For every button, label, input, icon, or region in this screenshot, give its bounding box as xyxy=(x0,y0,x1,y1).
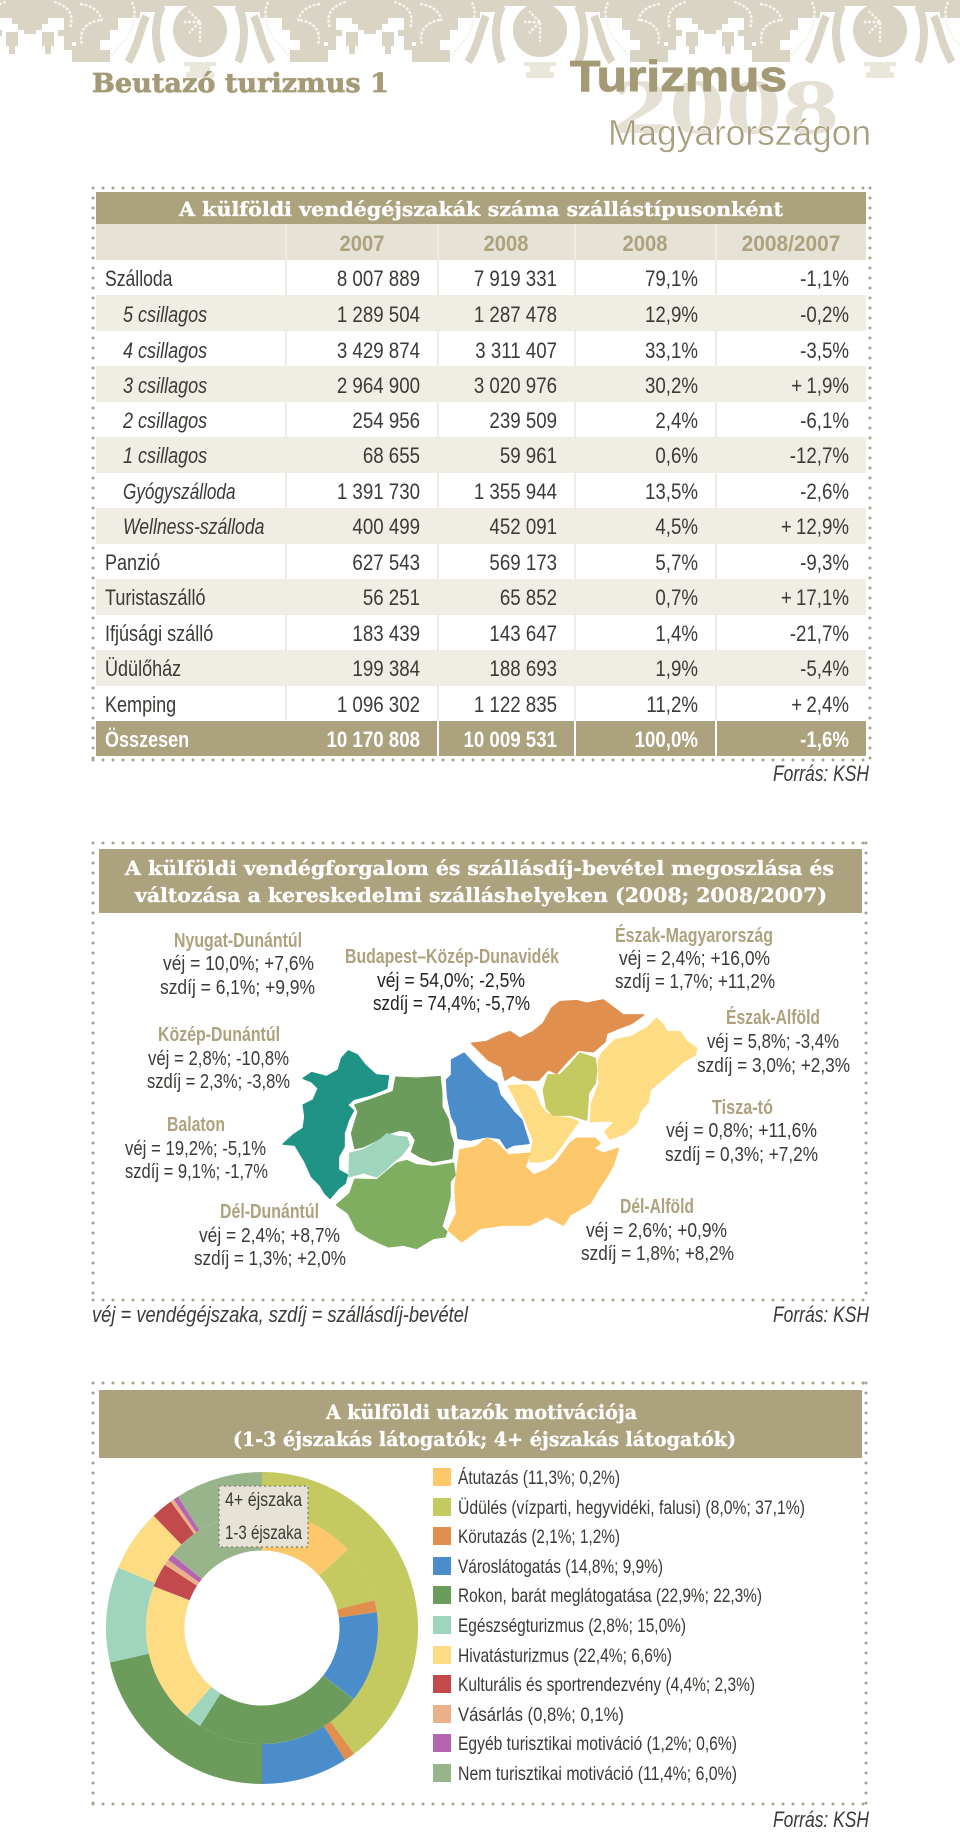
legend item: Vásárlás: Vásárlás (0,8%; 0,1%) xyxy=(458,1704,624,1726)
row: 5 csillagos: 12,9% xyxy=(645,304,698,327)
label: Budapest–Közép-Dunavidék: Budapest–Közép-Dunavidék xyxy=(345,946,560,968)
label: Dél-Dunántúl: véj = 2,4%; +8,7% xyxy=(199,1225,340,1247)
row: Panzió xyxy=(105,551,849,575)
panel: travel motivation xyxy=(70,1383,866,1820)
ring key box xyxy=(219,1486,308,1547)
row: Panzió: 569 173 xyxy=(489,552,557,575)
row: 5 csillagos xyxy=(123,303,849,327)
ring key box: 1-3 éjszaka xyxy=(225,1523,302,1544)
row: 4 csillagos: 33,1% xyxy=(645,340,698,363)
table column headers: 2008/2007 xyxy=(742,232,840,256)
row: Kemping: 1 096 302 xyxy=(337,694,420,717)
label: Észak-Magyarország: Észak-Magyarország xyxy=(615,924,773,947)
brand logo: Turizmus 2008 Magyarországon: Magyarországon xyxy=(608,112,871,153)
row: Turistaszálló: 0,7% xyxy=(655,587,698,610)
source note: map: Forrás: KSH xyxy=(773,1302,869,1327)
page section title: Beutazó turizmus 1 xyxy=(92,69,389,99)
motivation title bar: A külföldi utazók motivációja xyxy=(325,1400,637,1424)
map panel title bar: változása a kereskedelmi szálláshelyeken (2008; 2008/2007) xyxy=(134,883,827,907)
row: 4 csillagos: 4 csillagos xyxy=(123,339,207,363)
row: 1 csillagos: 1 csillagos xyxy=(123,444,207,468)
row: 5 csillagos: 1 289 504 xyxy=(337,304,420,327)
panel: guest nights by accommodation type xyxy=(93,188,870,760)
row: Turistaszálló: 56 251 xyxy=(363,587,420,610)
decorative lace header band xyxy=(0,0,960,84)
row: Panzió: Panzió xyxy=(105,551,160,575)
row: Üdülőház: Üdülőház xyxy=(105,657,181,681)
row: Gyógyszálloda: 1 391 730 xyxy=(337,481,420,504)
row: Összesen total: Összesen xyxy=(105,727,189,752)
row: Szálloda: 7 919 331 xyxy=(474,268,557,291)
row: Szálloda xyxy=(105,267,849,292)
legend item: Körutazás: Körutazás (2,1%; 1,2%) xyxy=(458,1526,620,1548)
row: 3 csillagos: 30,2% xyxy=(645,375,698,398)
region: Közép-Dunántúl xyxy=(352,1077,453,1162)
legend item: Rokon, barát meglátogatása: Rokon, barát meglátogatása (22,9%; 22,3%) xyxy=(458,1585,762,1607)
legend item: Átutazás xyxy=(433,1466,620,1489)
row: Összesen total: 10 009 531 xyxy=(463,729,557,752)
table title bar xyxy=(96,192,866,224)
row: Gyógyszálloda: 1 355 944 xyxy=(474,481,557,504)
label: Közép-Dunántúl: szdíj = 2,3%; -3,8% xyxy=(147,1071,290,1093)
legend item: Átutazás: Átutazás (11,3%; 0,2%) xyxy=(458,1466,620,1489)
label: Tisza-tó: véj = 0,8%; +11,6% xyxy=(666,1120,817,1142)
outer ring: 4+ nights xyxy=(70,1436,454,1820)
label: Észak-Alföld: szdíj = 3,0%; +2,3% xyxy=(697,1055,850,1077)
row: Turistaszálló: 65 852 xyxy=(500,587,557,610)
row: Panzió: 627 543 xyxy=(352,552,420,575)
map of Hungarian regions xyxy=(283,1000,697,1248)
panel: regional distribution map xyxy=(93,843,866,1300)
row: Ifjúsági szálló: -21,7% xyxy=(790,623,849,646)
table title bar: A külföldi vendégéjszakák száma szállástípusonként xyxy=(178,197,784,221)
row: 1 csillagos: -12,7% xyxy=(790,445,849,468)
row: Turistaszálló: +17,1% xyxy=(781,587,849,610)
row: 2 csillagos: -6,1% xyxy=(800,410,849,433)
ring key box: 4+ éjszaka xyxy=(225,1490,302,1511)
row: Szálloda: 79,1% xyxy=(645,268,698,291)
label: Észak-Magyarország: szdíj = 1,7%; +11,2% xyxy=(615,971,775,993)
row: Wellness-szálloda: 400 499 xyxy=(352,516,420,539)
region: Dél-Alföld xyxy=(448,1138,618,1242)
row: Összesen total xyxy=(96,721,866,756)
row: Kemping: 11,2% xyxy=(646,694,698,717)
label: Dél-Dunántúl: szdíj = 1,3%; +2,0% xyxy=(194,1248,346,1270)
row: 3 csillagos: 3 csillagos xyxy=(123,374,207,398)
region: Dél-Dunántúl xyxy=(337,1161,455,1248)
label: Tisza-tó xyxy=(665,1097,818,1166)
row: 4 csillagos: 3 311 407 xyxy=(475,340,557,363)
label: Észak-Alföld: véj = 5,8%; -3,4% xyxy=(707,1031,839,1053)
map panel title bar xyxy=(99,849,862,913)
region: Balaton xyxy=(349,1134,409,1177)
row: 3 csillagos: +1,9% xyxy=(791,375,849,398)
row: Turistaszálló: Turistaszálló xyxy=(105,586,206,610)
label: Dél-Dunántúl xyxy=(194,1201,346,1270)
motivation title bar: (1-3 éjszakás látogatók; 4+ éjszakás látogatók) xyxy=(233,1427,736,1451)
label: Balaton: szdíj = 9,1%; -1,7% xyxy=(125,1161,268,1183)
row: 1 csillagos: 68 655 xyxy=(363,445,420,468)
label: Közép-Dunántúl xyxy=(147,1024,290,1093)
row: Kemping xyxy=(105,693,849,717)
label: Dél-Alföld: véj = 2,6%; +0,9% xyxy=(586,1220,727,1242)
row: Wellness-szálloda: +12,9% xyxy=(781,516,849,539)
row: Ifjúsági szálló: 183 439 xyxy=(352,623,420,646)
source note: table: Forrás: KSH xyxy=(773,761,869,786)
label: Budapest–Közép-Dunavidék: szdíj = 74,4%; -5,7% xyxy=(373,993,530,1015)
label: Közép-Dunántúl: Közép-Dunántúl xyxy=(158,1024,280,1046)
row: Ifjúsági szálló: Ifjúsági szálló xyxy=(105,622,213,646)
label: Dél-Alföld: szdíj = 1,8%; +8,2% xyxy=(581,1243,734,1265)
region: Észak-Alföld xyxy=(591,1018,697,1139)
label: Nyugat-Dunántúl: Nyugat-Dunántúl xyxy=(174,930,302,952)
map panel title bar: A külföldi vendégforgalom és szállásdíj-bevétel megoszlása és xyxy=(124,856,834,880)
abbreviation note: véj = vendégéjszaka, szdíj = szállásdíj-bevétel xyxy=(92,1302,469,1327)
row: Turistaszálló xyxy=(105,586,849,610)
label: Balaton xyxy=(125,1114,268,1183)
row: Gyógyszálloda: -2,6% xyxy=(800,481,849,504)
table column headers: 2008 xyxy=(622,232,668,256)
label: Észak-Magyarország xyxy=(615,924,775,993)
row: 2 csillagos: 239 509 xyxy=(489,410,557,433)
brand logo: Turizmus 2008 Magyarországon xyxy=(570,52,871,153)
region: Tisza-tó xyxy=(543,1053,597,1120)
row: Ifjúsági szálló: 1,4% xyxy=(655,623,698,646)
label: Budapest–Közép-Dunavidék: véj = 54,0%; -2,5% xyxy=(377,970,525,992)
row: 2 csillagos xyxy=(122,409,849,433)
row: 3 csillagos xyxy=(123,374,849,398)
row: Összesen total: -1,6% xyxy=(800,729,849,752)
row: Wellness-szálloda xyxy=(123,515,849,540)
region: Észak-Magyarország xyxy=(472,1000,643,1080)
row: 2 csillagos: 2 csillagos xyxy=(122,409,207,433)
brand logo: Turizmus 2008 Magyarországon: 2008 xyxy=(612,63,839,150)
row: Üdülőház xyxy=(105,657,849,681)
region: central yellow xyxy=(508,1085,578,1162)
row: Üdülőház: 199 384 xyxy=(352,658,420,681)
legend item: Üdülés: Üdülés (vízparti, hegyvidéki, falusi) (8,0%; 37,1%) xyxy=(458,1497,805,1519)
brand logo: Turizmus 2008 Magyarországon: Turizmus xyxy=(570,52,787,101)
legend item: Egyéb turisztikai motiváció: Egyéb turisztikai motiváció (1,2%; 0,6%) xyxy=(458,1733,737,1755)
label: Tisza-tó: Tisza-tó xyxy=(712,1097,773,1119)
row: 2 csillagos: 2,4% xyxy=(655,410,698,433)
table column headers: 2008 xyxy=(483,232,529,256)
row: Wellness-szálloda: Wellness-szálloda xyxy=(123,515,264,540)
label: Budapest–Közép-Dunavidék xyxy=(345,946,560,1015)
row: Kemping: 1 122 835 xyxy=(474,694,557,717)
row: Wellness-szálloda: 4,5% xyxy=(655,516,698,539)
inner ring: 1-3 nights xyxy=(125,1491,399,1765)
row: 3 csillagos: 2 964 900 xyxy=(337,375,420,398)
label: Észak-Alföld: Észak-Alföld xyxy=(726,1006,820,1029)
donut chart xyxy=(70,1436,454,1820)
row: Panzió: 5,7% xyxy=(655,552,698,575)
row: 4 csillagos: -3,5% xyxy=(800,340,849,363)
row: 3 csillagos: 3 020 976 xyxy=(474,375,557,398)
row: Üdülőház: 188 693 xyxy=(489,658,557,681)
legend xyxy=(433,1466,805,1785)
label: Dél-Dunántúl: Dél-Dunántúl xyxy=(220,1201,319,1223)
row: Gyógyszálloda: Gyógyszálloda xyxy=(123,480,236,505)
row: Ifjúsági szálló: 143 647 xyxy=(489,623,557,646)
label: Közép-Dunántúl: véj = 2,8%; -10,8% xyxy=(148,1048,289,1070)
row: Gyógyszálloda xyxy=(123,480,849,505)
row: Összesen total: 10 170 808 xyxy=(326,729,420,752)
label: Nyugat-Dunántúl: véj = 10,0%; +7,6% xyxy=(163,953,314,975)
row: 2 csillagos: 254 956 xyxy=(352,410,420,433)
row: Kemping: +2,4% xyxy=(791,694,849,717)
legend item: Kulturális és sportrendezvény: Kulturális és sportrendezvény (4,4%; 2,3%) xyxy=(458,1674,755,1696)
row: Üdülőház: 1,9% xyxy=(655,658,698,681)
row: Panzió: -9,3% xyxy=(800,552,849,575)
row: Kemping: Kemping xyxy=(105,693,176,717)
legend item: Egészségturizmus: Egészségturizmus (2,8%; 15,0%) xyxy=(458,1615,686,1637)
region: Nyugat-Dunántúl xyxy=(283,1051,388,1198)
legend item: Városlátogatás: Városlátogatás (14,8%; 9,9%) xyxy=(458,1556,663,1578)
row: Wellness-szálloda: 452 091 xyxy=(489,516,557,539)
row: Ifjúsági szálló xyxy=(105,622,849,646)
motivation title bar xyxy=(99,1390,862,1458)
label: Dél-Alföld xyxy=(581,1196,734,1265)
label: Észak-Alföld xyxy=(697,1006,850,1077)
row: 1 csillagos: 59 961 xyxy=(500,445,557,468)
label: Balaton: véj = 19,2%; -5,1% xyxy=(125,1138,266,1160)
label: Balaton: Balaton xyxy=(167,1114,225,1136)
row: Szálloda: -1,1% xyxy=(800,268,849,291)
row: 4 csillagos: 3 429 874 xyxy=(337,340,420,363)
label: Dél-Alföld: Dél-Alföld xyxy=(620,1196,694,1218)
row: 5 csillagos: 1 287 478 xyxy=(474,304,557,327)
region: Budapest–Közép-Dunavidék xyxy=(447,1053,529,1148)
row: 5 csillagos: -0,2% xyxy=(800,304,849,327)
row: Gyógyszálloda: 13,5% xyxy=(645,481,698,504)
row: Szálloda: Szálloda xyxy=(105,267,173,292)
row: 1 csillagos xyxy=(123,444,849,468)
row: 4 csillagos xyxy=(123,339,849,363)
label: Tisza-tó: szdíj = 0,3%; +7,2% xyxy=(665,1144,818,1166)
row: 1 csillagos: 0,6% xyxy=(655,445,698,468)
row: 5 csillagos: 5 csillagos xyxy=(123,303,207,327)
row: Üdülőház: -5,4% xyxy=(800,658,849,681)
legend item: Nem turisztikai motiváció: Nem turisztikai motiváció (11,4%; 6,0%) xyxy=(458,1763,737,1785)
legend item: Hivatásturizmus: Hivatásturizmus (22,4%; 6,6%) xyxy=(458,1645,672,1667)
row: Összesen total: 100,0% xyxy=(635,729,698,752)
table column headers xyxy=(96,224,866,260)
row: Szálloda: 8 007 889 xyxy=(337,268,420,291)
table column headers: 2007 xyxy=(339,232,385,256)
label: Nyugat-Dunántúl: szdíj = 6,1%; +9,9% xyxy=(160,977,315,999)
label: Nyugat-Dunántúl xyxy=(160,930,315,999)
label: Észak-Magyarország: véj = 2,4%; +16,0% xyxy=(619,948,770,970)
source note: motivation: Forrás: KSH xyxy=(773,1807,869,1832)
